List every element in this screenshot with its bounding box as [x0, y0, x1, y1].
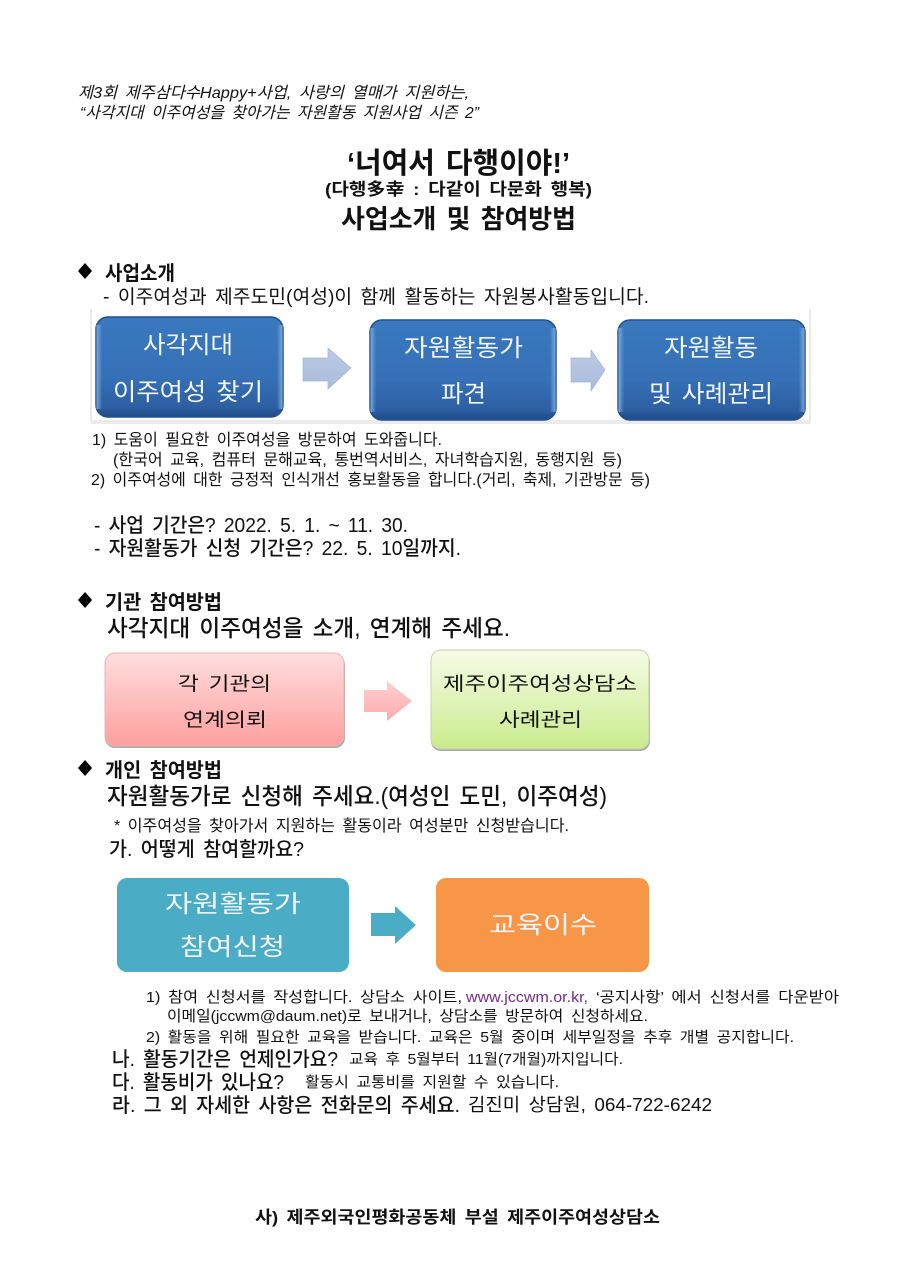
FAQ: 활동비: 다. 활동비가 있나요? [112, 1071, 284, 1094]
title: 사업소개 및 참여방법 [341, 204, 576, 234]
application steps: ‘공지사항’ 에서 신청서를 다운받아 [596, 989, 839, 1006]
individual instruction: 자원활동가로 신청해 주세요.(여성인 도민, 이주여성) [107, 783, 607, 809]
box: 자원활동가 참여신청: 참여신청 [180, 934, 285, 961]
project dates: - 자원활동가 신청 기간은? 22. 5. 10일까지. [94, 537, 461, 560]
FAQ: contact: 김진미 상담원, 064-722-6242 [468, 1095, 712, 1115]
flow diagram: institution [105, 650, 650, 751]
individual instruction: * 이주여성을 찾아가서 지원하는 활동이라 여성분만 신청받습니다. [114, 817, 569, 835]
box: 각 기관의 연계의뢰: 각 기관의 [178, 673, 271, 695]
arrow 2 [571, 350, 605, 391]
header note: 제3회 제주삼다수Happy+사업, 사랑의 열매가 지원하는, [78, 84, 469, 102]
institution instruction: 사각지대 이주여성을 소개, 연계해 주세요. [107, 615, 510, 641]
title [325, 147, 592, 234]
intro text: - 이주여성과 제주도민(여성)이 함께 활동하는 자원봉사활동입니다. [103, 286, 649, 308]
step box: 자원활동 및 사례관리 [618, 320, 805, 420]
FAQ: 활동기간 [112, 1048, 623, 1071]
header note [78, 84, 480, 122]
FAQ: contact: 라. 그 외 자세한 사항은 전화문의 주세요. [112, 1094, 460, 1117]
box: 자원활동가 참여신청 [117, 878, 349, 972]
application steps: www.jccwm.or.kr, [465, 989, 588, 1006]
title: (다행多幸 : 다같이 다문화 행복) [325, 179, 592, 199]
project dates [94, 514, 461, 560]
box: 교육이수 [436, 878, 649, 972]
activity list [91, 431, 650, 489]
step box: 사각지대 이주여성 찾기 [96, 317, 283, 417]
step box: 자원활동 및 사례관리: 자원활동 [664, 335, 758, 362]
step box: 자원활동가 파견: 파견 [441, 381, 486, 408]
project dates: - 사업 기간은? 2022. 5. 1. ~ 11. 30. [94, 514, 408, 537]
box: 각 기관의 연계의뢰 [105, 653, 345, 748]
application steps [146, 989, 839, 1046]
section heading: 사업소개 [78, 262, 175, 285]
box: 자원활동가 참여신청: 자원활동가 [165, 891, 301, 918]
individual instruction [107, 783, 607, 861]
box: 제주이주여성상담소 사례관리: 제주이주여성상담소 [443, 673, 637, 695]
step box: 사각지대 이주여성 찾기: 이주여성 찾기 [113, 379, 263, 406]
application steps: 2) 활동을 위해 필요한 교육을 받습니다. 교육은 5월 중이며 세부일정을 추후 개별 공지합니다. [146, 1029, 794, 1046]
step box: 자원활동가 파견 [370, 320, 556, 420]
section heading: 사업소개: 사업소개 [105, 262, 175, 285]
FAQ: 활동비: 활동시 교통비를 지원할 수 있습니다. [305, 1074, 559, 1091]
box: 제주이주여성상담소 사례관리: 사례관리 [499, 709, 582, 731]
step box: 자원활동 및 사례관리: 및 사례관리 [649, 381, 773, 408]
title: ‘너여서 다행이야!’ [347, 147, 570, 180]
box: 교육이수: 교육이수 [489, 912, 597, 939]
step box: 사각지대 이주여성 찾기: 사각지대 [143, 332, 233, 359]
section heading: 개인 참여방법: 개인 참여방법 [105, 759, 222, 782]
application steps: 1) 참여 신청서를 작성합니다. 상담소 사이트, [146, 989, 462, 1006]
FAQ: 활동비 [112, 1071, 559, 1094]
box: 각 기관의 연계의뢰: 연계의뢰 [183, 709, 267, 731]
flow diagram: individual [117, 878, 649, 972]
arrow [371, 906, 416, 944]
arrow 1 [303, 348, 351, 389]
box: 제주이주여성상담소 사례관리 [431, 650, 650, 751]
activity list: 1) 도움이 필요한 이주여성을 방문하여 도와줍니다. [92, 431, 442, 449]
individual instruction: 가. 어떻게 참여할까요? [109, 838, 304, 861]
flow diagram: business process [91, 309, 811, 424]
FAQ: contact [112, 1094, 712, 1117]
arrow [364, 681, 412, 721]
FAQ: 활동기간: 나. 활동기간은 언제인가요? [112, 1048, 338, 1071]
step box: 자원활동가 파견: 자원활동가 [404, 335, 523, 362]
activity list: 2) 이주여성에 대한 긍정적 인식개선 홍보활동을 합니다.(거리, 축제, 기관방문 등) [91, 471, 650, 489]
activity list: (한국어 교육, 컴퓨터 문해교육, 통번역서비스, 자녀학습지원, 동행지원 등) [113, 451, 622, 469]
application steps: 이메일(jccwm@daum.net)로 보내거나, 상담소를 방문하여 신청하세요. [167, 1008, 648, 1025]
header note: “사각지대 이주여성을 찾아가는 자원활동 지원사업 시즌 2” [80, 104, 480, 122]
FAQ: 활동기간: 교육 후 5월부터 11월(7개월)까지입니다. [349, 1051, 623, 1068]
footer: 사) 제주외국인평화공동체 부설 제주이주여성상담소 [255, 1208, 660, 1227]
section heading: 기관 참여방법: 기관 참여방법 [105, 591, 222, 614]
